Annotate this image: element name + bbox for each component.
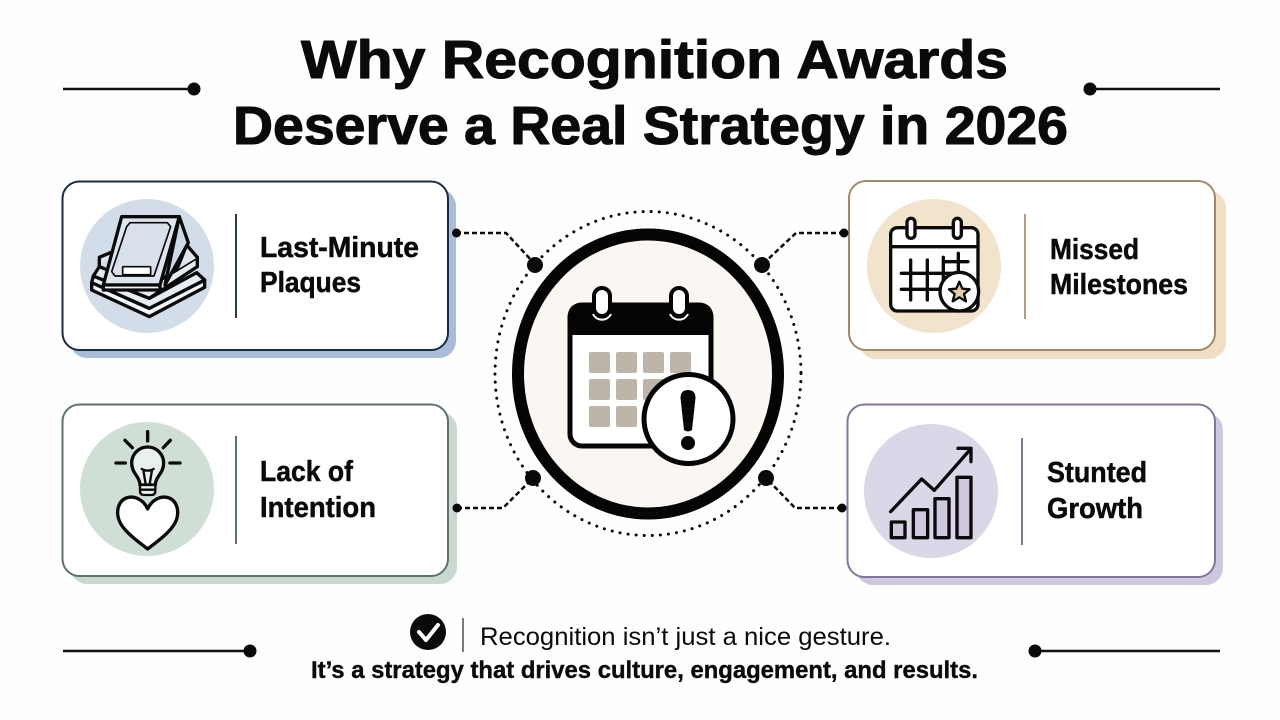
label: Missed Milestones: Missed (1050, 234, 1139, 266)
label: Missed Milestones (1050, 234, 1188, 301)
title: Why Recognition Awards (301, 30, 1008, 90)
label: Lack of Intention: Intention (260, 492, 376, 524)
label: Lack of Intention: Lack of (260, 456, 353, 488)
footer rule left (63, 644, 256, 658)
panel: missed milestones (849, 181, 1226, 359)
footer message: Recognition isn’t just a nice gesture. (480, 623, 891, 651)
icon: lightbulb and heart (116, 432, 180, 549)
divider (235, 436, 237, 544)
dotted ring (495, 212, 801, 536)
icon: calendar with alert (568, 288, 733, 464)
connector bottom right (758, 470, 846, 512)
icon: rising bar chart (891, 448, 971, 538)
label: Stunted Growth: Stunted (1047, 457, 1147, 489)
connector top right (754, 228, 848, 273)
icon: calendar with star (891, 218, 979, 311)
panel: stunted growth (848, 404, 1223, 585)
label: Last-Minute Plaques (260, 232, 419, 299)
divider (1024, 214, 1026, 319)
panel: lack of intention (62, 404, 457, 584)
connector top left (452, 228, 543, 273)
icon: check badge (410, 614, 446, 650)
label: Stunted Growth: Growth (1047, 493, 1143, 525)
footer rule right (1028, 644, 1220, 658)
divider (235, 214, 237, 318)
icon: stacked plaques (92, 217, 205, 317)
divider (1021, 438, 1023, 545)
label: Lack of Intention (260, 456, 376, 524)
footer message: It’s a strategy that drives culture, engagement, and results. (311, 657, 978, 684)
title: Deserve a Real Strategy in 2026 (233, 96, 1068, 156)
footer divider (462, 618, 464, 652)
label: Last-Minute Plaques: Last-Minute (260, 232, 419, 264)
label: Stunted Growth (1047, 457, 1147, 525)
footer message (311, 623, 978, 684)
panel: last-minute plaques (62, 182, 456, 358)
label: Last-Minute Plaques: Plaques (260, 267, 361, 299)
title rule right (1084, 82, 1220, 96)
connector bottom left (452, 470, 541, 512)
center circle (518, 234, 778, 514)
label: Missed Milestones: Milestones (1050, 269, 1188, 301)
title rule left (63, 82, 200, 96)
title (233, 30, 1068, 156)
